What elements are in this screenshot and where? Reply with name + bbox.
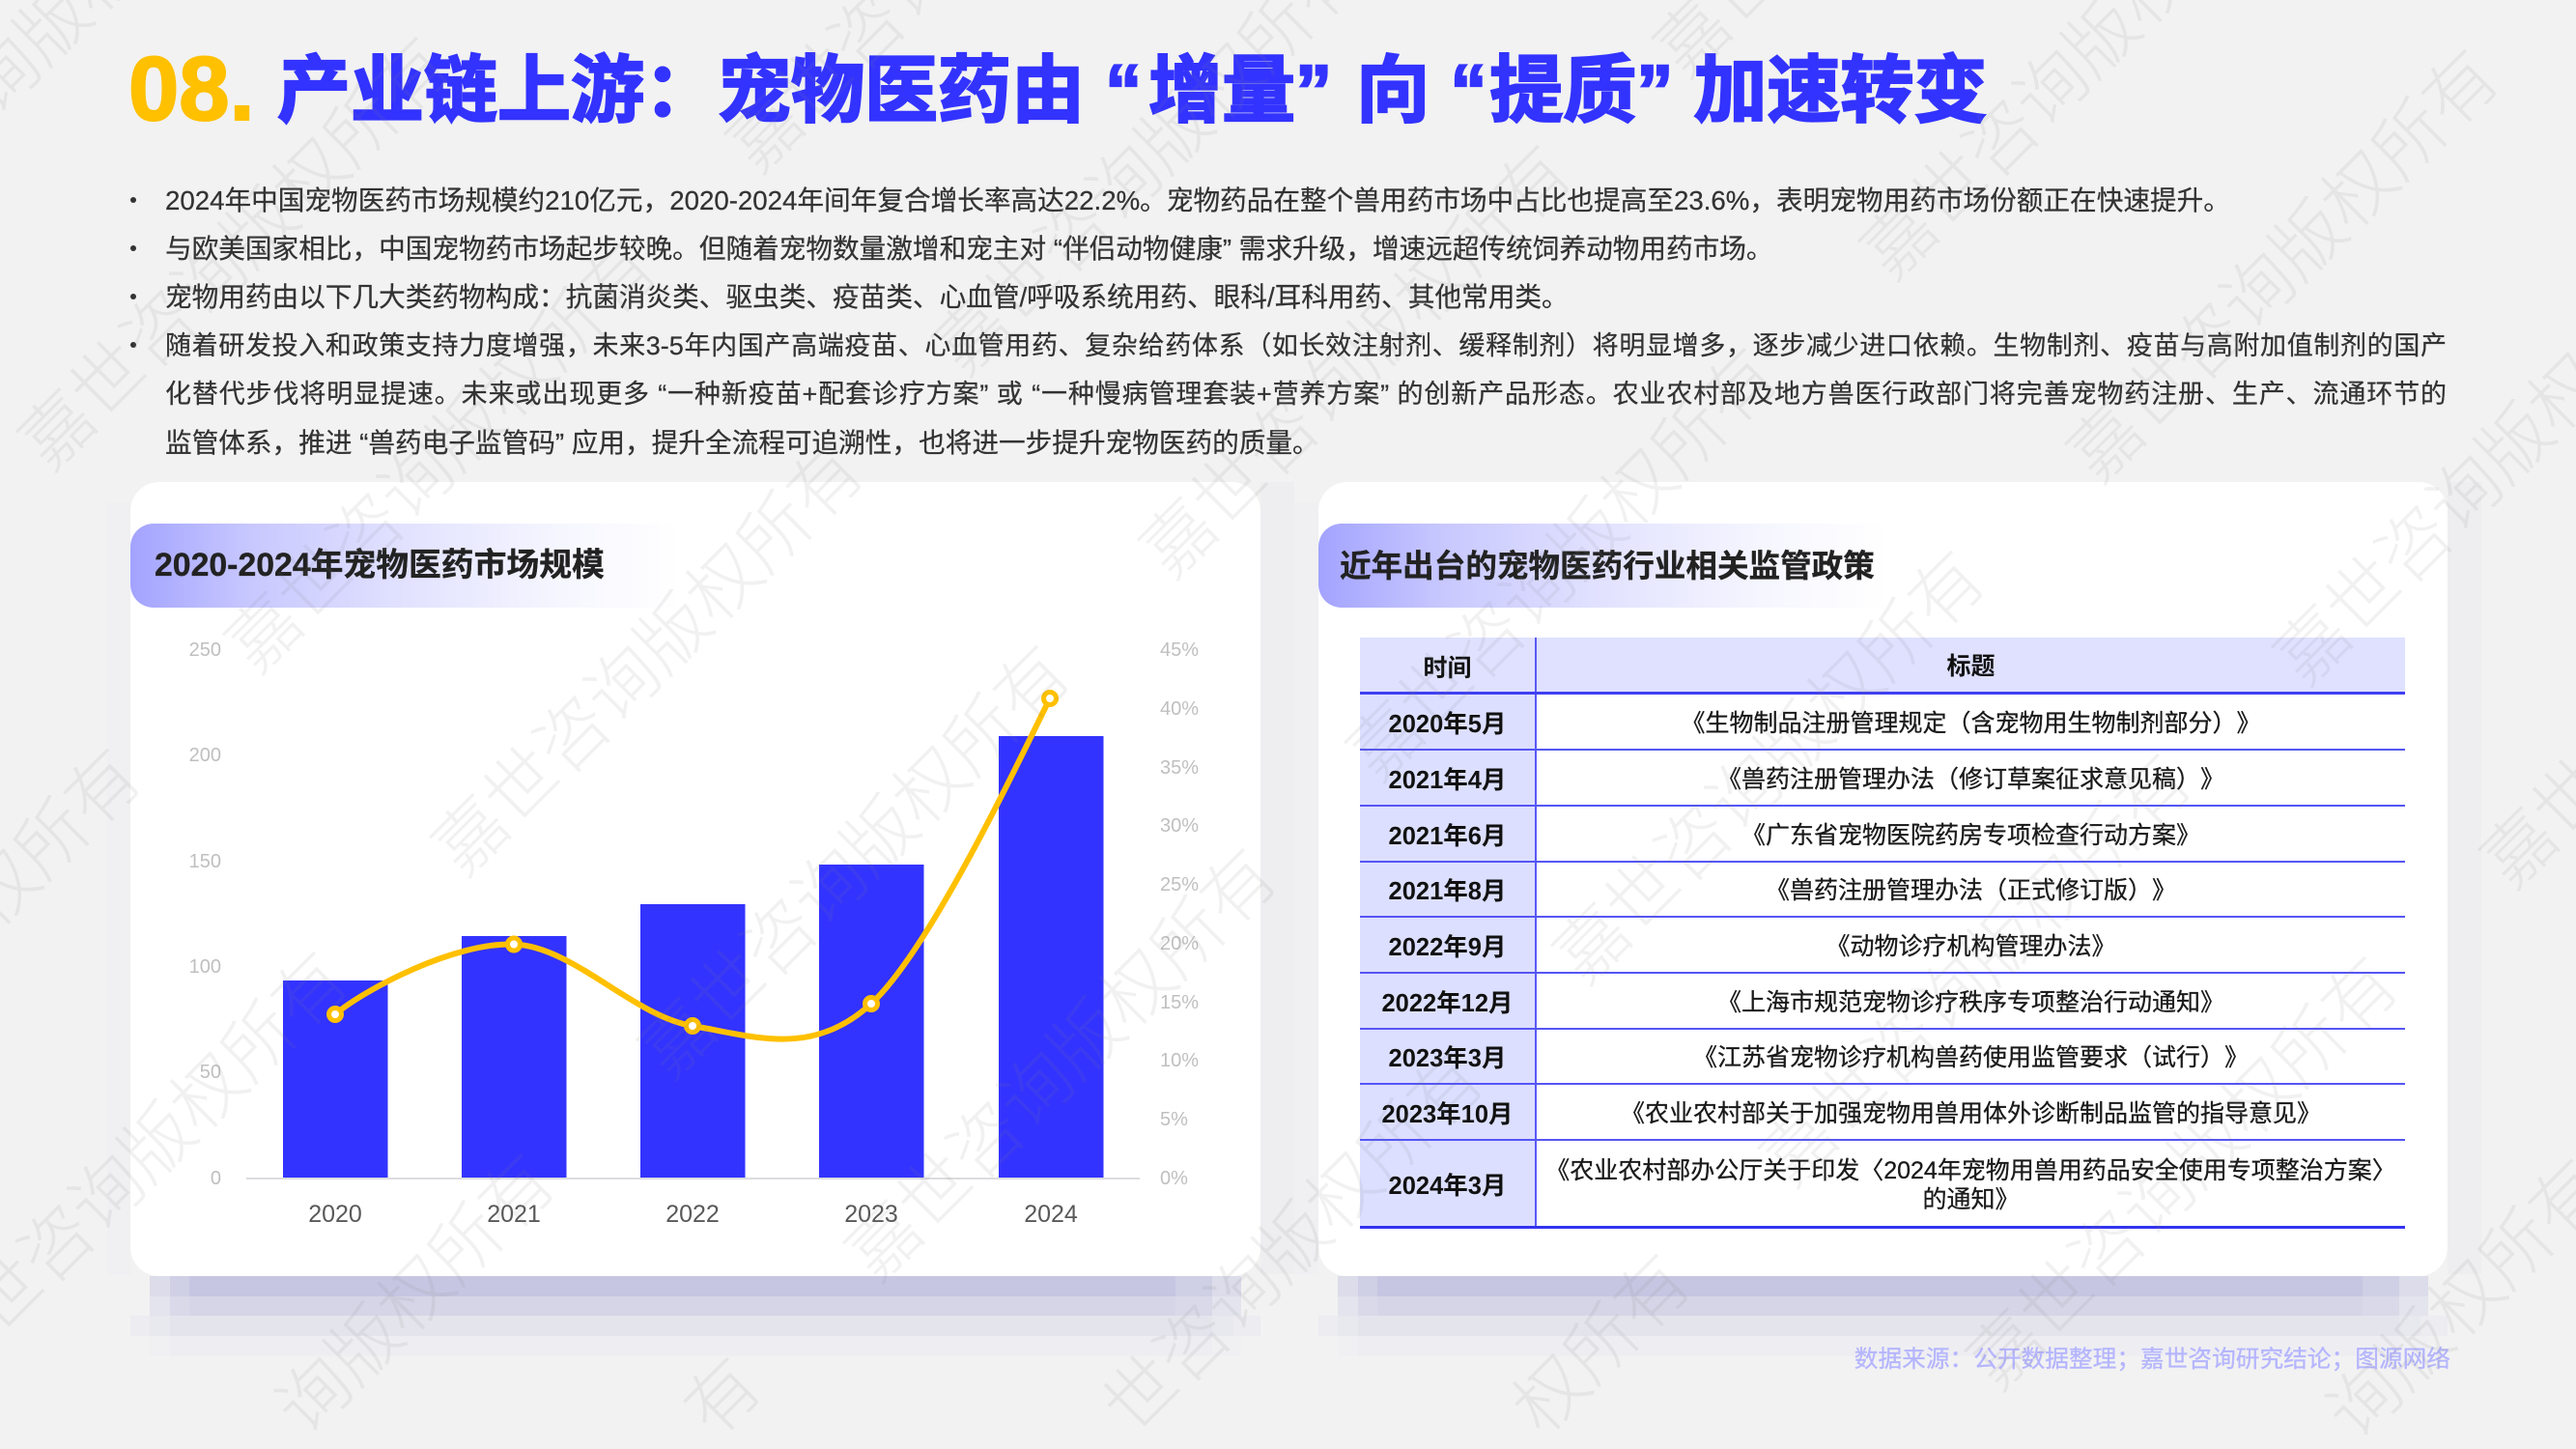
- bullet 2: [130, 245, 136, 251]
- bullet 3: [130, 294, 136, 299]
- row 2020年5月: 《生物制品注册管理规定（含宠物用生物制剂部分）》: [1681, 709, 2260, 736]
- watermark pattern: 询版权所有: [248, 1127, 575, 1449]
- panel heading: policies: [1318, 524, 1888, 608]
- panel: market size chart card: [130, 482, 1260, 1276]
- text line 3: 宠物用药由以下几大类药物构成：抗菌消炎类、驱虫类、疫苗类、心血管/呼吸系统用药、眼科/耳科用药、其他常用类。: [165, 282, 1569, 312]
- line markers: [328, 692, 1057, 1032]
- row 2023年10月: [1360, 1085, 2405, 1141]
- left axis labels: 50: [200, 1062, 221, 1083]
- row 2023年3月: 2023年3月: [1389, 1045, 1506, 1072]
- row 2023年3月: [1360, 1030, 2405, 1085]
- table header: [1360, 638, 2405, 695]
- row 2021年8月: 《兽药注册管理办法（正式修订版）》: [1766, 877, 2176, 904]
- left axis labels: 0: [211, 1168, 221, 1189]
- row 2021年4月: [1360, 751, 2405, 807]
- right axis labels: [1160, 639, 1199, 1189]
- row 2021年6月: 2021年6月: [1389, 823, 1506, 850]
- table header: 时间: [1423, 655, 1472, 682]
- watermark pattern: 嘉世咨询版权所有: [1940, 930, 2418, 1407]
- left axis labels: [189, 639, 221, 1189]
- row 2021年6月: 《广东省宠物医院药房专项检查行动方案》: [1741, 821, 2200, 848]
- panel heading: market size: [130, 524, 681, 608]
- right axis labels: 30%: [1160, 815, 1199, 837]
- row 2023年3月: 《江苏省宠物诊疗机构兽药使用监管要求（试行）》: [1693, 1044, 2249, 1071]
- row 2020年5月: 2020年5月: [1389, 711, 1506, 738]
- panel: policy table card: [1318, 482, 2448, 1276]
- row 2024年3月: 2024年3月: [1389, 1173, 1506, 1200]
- combo chart: bars and growth line: [189, 639, 1199, 1228]
- right axis labels: 5%: [1160, 1109, 1188, 1130]
- panel heading: policies: 近年出台的宠物医药行业相关监管政策: [1340, 548, 1875, 583]
- watermark pattern: 世咨询版权所有: [1076, 1025, 1503, 1449]
- row 2022年9月: [1360, 918, 2405, 974]
- row 2022年12月: 《上海市规范宠物诊疗秩序专项整治行动通知》: [1717, 989, 2224, 1016]
- right axis labels: 40%: [1160, 698, 1199, 720]
- category labels: 2023: [844, 1201, 898, 1228]
- row 2022年12月: [1360, 974, 2405, 1030]
- left axis labels: 150: [189, 851, 221, 872]
- category labels: 2020: [308, 1201, 362, 1228]
- text line 1: 2024年中国宠物医药市场规模约210亿元，2020-2024年间年复合增长率高达22.2%。宠物药品在整个兽用药市场中占比也提高至23.6%，表明宠物用药市场份额正在快速提升。: [165, 185, 2230, 215]
- bullet 1: [130, 197, 136, 203]
- right axis labels: 35%: [1160, 757, 1199, 779]
- left axis labels: 250: [189, 639, 221, 661]
- right axis labels: 25%: [1160, 874, 1199, 895]
- category labels: [308, 1201, 1078, 1228]
- row 2020年5月: [1360, 695, 2405, 751]
- watermark pattern: 嘉世咨询版权所有: [406, 416, 883, 894]
- policy table: [1360, 638, 2405, 1229]
- right axis labels: 15%: [1160, 992, 1199, 1013]
- watermark pattern: 嘉世咨询版权所有: [1114, 119, 1591, 596]
- text line 2: 与欧美国家相比，中国宠物药市场起步较晚。但随着宠物数量激增和宠主对 “伴侣动物健康” 需求升级，增速远超传统饲养动物用药市场。: [165, 234, 1773, 264]
- source note: 数据来源：公开数据整理；嘉世咨询研究结论；图源网络: [1854, 1347, 2450, 1373]
- x axis line: [246, 1178, 1140, 1179]
- row 2021年6月: [1360, 807, 2405, 863]
- row 2022年12月: 2022年12月: [1381, 989, 1514, 1016]
- watermark pattern: 嘉世咨询版权所有: [1734, 727, 2211, 1205]
- row 2022年9月: 《动物诊疗机构管理办法》: [1826, 933, 2115, 960]
- right axis labels: 45%: [1160, 639, 1199, 661]
- right axis labels: 10%: [1160, 1050, 1199, 1071]
- category labels: 2024: [1024, 1201, 1078, 1228]
- row 2024年3月: 《农业农村部办公厅关于印发〈2024年宠物用兽用药品安全使用专项整治方案〉: [1545, 1157, 2396, 1184]
- text line 4: 随着研发投入和政策支持力度增强，未来3-5年内国产高端疫苗、心血管用药、复杂给药体系（如长效注射剂、缓释制剂）将明显增多，逐步减少进口依赖。生物制剂、疫苗与高附加值制剂的国产: [165, 331, 2447, 360]
- row 2021年8月: 2021年8月: [1389, 878, 1506, 905]
- table header: 标题: [1946, 653, 1996, 680]
- watermark pattern: 嘉世咨询版权所有: [1320, 322, 1798, 799]
- text line 5: 化替代步伐将明显提速。未来或出现更多 “一种新疫苗+配套诊疗方案” 或 “一种慢病管理套装+营养方案” 的创新产品形态。农业农村部及地方兽医行政部门将完善宠物药注册、生产、流通环节的: [165, 380, 2447, 409]
- category labels: 2021: [487, 1201, 541, 1228]
- text line 6: 监管体系，推进 “兽药电子监管码” 应用，提升全流程可追溯性，也将进一步提升宠物医药的质量。: [165, 428, 1319, 458]
- panel heading: market size: 2020-2024年宠物医药市场规模: [155, 547, 605, 583]
- left axis labels: 200: [189, 745, 221, 766]
- watermark pattern: 嘉世咨询版权所有: [199, 213, 676, 691]
- bullet 4: [130, 342, 136, 348]
- category labels: 2022: [665, 1201, 720, 1228]
- title: 产业链上游：宠物医药由 “增量” 向 “提质” 加速转变: [277, 50, 1988, 132]
- row 2022年9月: 2022年9月: [1389, 933, 1506, 960]
- watermark pattern: 嘉世咨询版权所有: [0, 11, 469, 488]
- watermark pattern: 嘉世咨询版权所有: [2041, 23, 2518, 500]
- title: 08.: [128, 38, 255, 139]
- watermark pattern: 嘉世咨询版权所有: [1527, 525, 2004, 1002]
- right axis labels: 0%: [1160, 1168, 1188, 1189]
- row 2021年4月: 《兽药注册管理办法（修订草案征求意见稿）》: [1717, 765, 2224, 792]
- right axis labels: 20%: [1160, 933, 1199, 954]
- row 2024年3月: [1360, 1141, 2405, 1229]
- growth line: [335, 698, 1050, 1039]
- watermark pattern: 嘉世咨询版权所有: [819, 822, 1296, 1299]
- row 2021年4月: 2021年4月: [1389, 767, 1506, 794]
- row 2023年10月: 《农业农村部关于加强宠物用兽用体外诊断制品监管的指导意见》: [1621, 1099, 2321, 1126]
- row 2021年8月: [1360, 863, 2405, 918]
- row 2024年3月: 的通知》: [1922, 1186, 2019, 1213]
- bars: [283, 736, 1103, 1178]
- watermark pattern: 权所有: [1486, 1228, 1710, 1449]
- row 2023年10月: 2023年10月: [1381, 1101, 1514, 1128]
- left axis labels: 100: [189, 956, 221, 978]
- watermark pattern: 嘉世咨询版权所有: [612, 619, 1090, 1096]
